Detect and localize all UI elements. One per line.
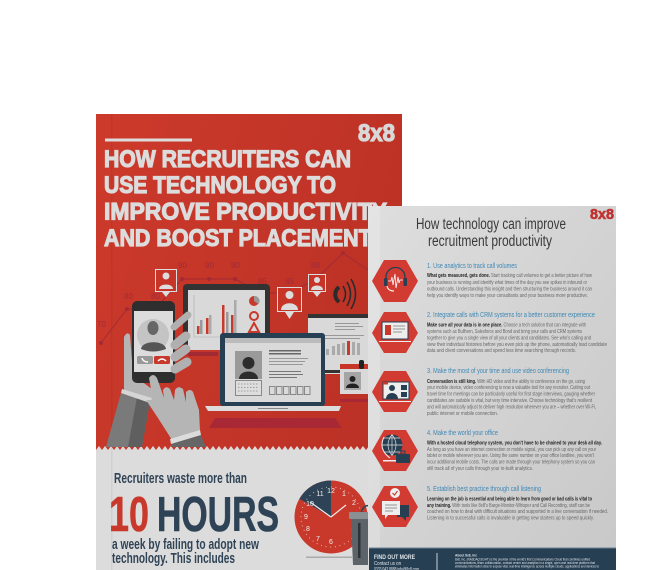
page background [368, 206, 616, 570]
heading 3: 3. Make the most of your time and use video conferencing [427, 368, 569, 375]
line chart background: 88 [311, 261, 320, 270]
line chart background: 70 [97, 320, 106, 329]
badge shadow [340, 399, 369, 402]
item 1: analytics [372, 260, 593, 302]
heading 1: 1. Use analytics to track call volumes [427, 263, 517, 270]
page fold [368, 206, 380, 570]
icon: clock: 8 [306, 526, 310, 533]
footer contact: FIND OUT MORE [374, 555, 415, 561]
body 2: data and client conversations and spend less time searching through records. [427, 348, 576, 354]
line chart background: 90 [178, 261, 187, 270]
heading 2: 2. Integrate calls with CRM systems for a better customer experience [427, 312, 595, 319]
body 3 [427, 379, 596, 417]
icon: headset hexagon [372, 260, 418, 302]
laptop with candidate profile [205, 333, 341, 411]
icon: chat bubbles hexagon [372, 486, 418, 527]
icon: clock: 10 [306, 501, 314, 508]
body 3: public internet or mobile connection. [427, 411, 498, 417]
clock shadow [306, 556, 352, 558]
cover title: USE TECHNOLOGY TO [104, 172, 336, 199]
footer about text: eliminates information silos to expose vital, real-time intelligence across multiple clouds, applications and devices to [455, 564, 599, 568]
footer about text: 8x8, Inc. (NASDAQ:EGHT) is the provider of the world's first Communications Cloud that combines unified [455, 558, 590, 562]
ID badge [340, 360, 369, 394]
cover logo 8x8: 8x8 [358, 120, 395, 147]
icon: person pin centre [278, 288, 302, 319]
body 1: help you identify ways to make your consultants and your business more productive. [427, 293, 588, 299]
cover lower grey area [96, 446, 370, 570]
icon: clock: 6 [329, 539, 333, 546]
page title [416, 216, 566, 250]
panel: cover brochure [96, 114, 402, 570]
shadow under tablet [188, 352, 218, 356]
icon: clock: 11 [316, 491, 324, 498]
line chart background: 80 [151, 292, 160, 301]
footer about text: About 8x8, Inc [455, 554, 477, 558]
footer contact [374, 555, 419, 570]
icon: phone with sound waves [335, 279, 356, 309]
body 1: What gets measured, gets done. Start tracking call volumes to get a better picture of how [427, 273, 593, 279]
page logo 8x8: 8x8 [590, 206, 614, 223]
body 1: outbound calls. Understanding this insight and then structuring the business around it can [427, 286, 592, 292]
icon: clock [294, 480, 368, 554]
item 4: world office [372, 430, 602, 472]
body 2 [427, 322, 607, 354]
text: recruiters waste more than: Recruiters waste more than [114, 470, 247, 487]
footer divider [436, 553, 438, 570]
icon: clock: 1 [342, 491, 346, 498]
stat: 10 hours: 10 [109, 488, 149, 542]
laptop shadow [209, 418, 342, 428]
panel: inside page [368, 206, 616, 570]
heading 4: 4. Make the world your office [427, 430, 498, 437]
pointing hand and sleeve [146, 375, 206, 447]
icon: clock: 7 [316, 536, 320, 543]
text: a week by failing [112, 536, 259, 567]
footer about text [455, 554, 599, 568]
body 3: your mobile device, video conferencing is now a valuable tool for any recruiter. Cutting out [427, 385, 590, 391]
body 5: any training. With tools like 8x8's Barge-Monitor-Whisper and Call Recording, staff can be [427, 503, 590, 509]
text: a week by failing: technology. This includes [112, 550, 235, 567]
icon: clock: 2 [352, 500, 356, 507]
cover red background [96, 114, 402, 450]
heading 5: 5. Establish best practice through call listening [427, 486, 541, 493]
item 5: call listening [372, 486, 608, 527]
icon: trash can [349, 506, 370, 565]
body 3: Conversation is still king. With HD video and the ability to conference on the go, using [427, 379, 585, 385]
stat: 10 hours: HOURS [157, 488, 279, 542]
body 1 [427, 273, 593, 299]
icon: clock: 9 [304, 514, 308, 521]
body 5 [427, 496, 608, 522]
icon: person pin left [156, 270, 176, 297]
footer contact: Contact us on [374, 561, 401, 567]
line chart background [97, 251, 368, 345]
icon: globe hexagon [372, 430, 418, 471]
body 2: Make sure all your data is in one place. Choose a tech solution that can integrate with [427, 322, 586, 328]
body 3: travel time for meetings can be particularly useful for first stage interviews, gauging whether [427, 392, 595, 398]
icon: clock: 12 [327, 488, 335, 495]
text: a week by failing: a week by failing to adopt new [112, 536, 259, 553]
icon: clock: 5 [351, 527, 355, 534]
cover title [104, 146, 387, 252]
stat: 10 hours [109, 488, 279, 542]
body 5: Listening in to successful calls is invaluable in getting new starters up to speed quickly. [427, 516, 594, 522]
body 2: together to give you a single view of all your clients and candidates. See who's calling and [427, 336, 591, 342]
body 4: still track all of your calls through your in-built analytics. [427, 466, 533, 472]
body 4: tablet or mobile wherever you are. Using the same number on your office landline, you won't [427, 453, 594, 459]
icon: video call hexagon [372, 371, 418, 412]
footer band [369, 548, 616, 570]
line chart background: 80 [124, 292, 133, 301]
line chart background: 90 [231, 261, 240, 270]
browser window right [308, 314, 368, 374]
icon: laptop hexagon [372, 312, 418, 353]
icon: person pin right [308, 274, 326, 297]
cover title: HOW RECRUITERS CAN [104, 146, 351, 173]
page title: How technology can improve [416, 216, 566, 233]
item 2: CRM [372, 312, 607, 354]
line chart background: 85 [285, 277, 294, 286]
item 3: video conferencing [372, 368, 596, 417]
cover spine fold [111, 114, 112, 570]
left sleeve and holding hand [106, 333, 160, 447]
line chart background: 85 [258, 277, 267, 286]
footer about text: communications, team collaboration, contact center and analytics in a single, open and real-time platform that [455, 561, 595, 565]
smartphone [132, 301, 175, 383]
body 4: incur additional mobile costs. The calls are made through your telephony system so you can [427, 460, 595, 466]
tablet with charts [183, 284, 270, 350]
cover title: AND BOOST PLACEMENTS [104, 225, 386, 252]
line chart background: 90 [205, 261, 214, 270]
body 1: your business is running and identify what times of the day you see spikes in inbound or [427, 280, 587, 286]
cover title: IMPROVE PRODUCTIVITY [104, 198, 387, 226]
page title: recruitment productivity [428, 233, 552, 250]
cover title rule [105, 138, 192, 142]
fingers gripping phone [174, 315, 188, 369]
body 2: systems such as Bullhorn, Salesforce and Bond and bring your calls and CRM systems [427, 329, 582, 335]
body 3: candidates are suitable is vital, but very time intensive. Choose technology that's resilient [427, 398, 592, 404]
body 4 [427, 440, 602, 472]
